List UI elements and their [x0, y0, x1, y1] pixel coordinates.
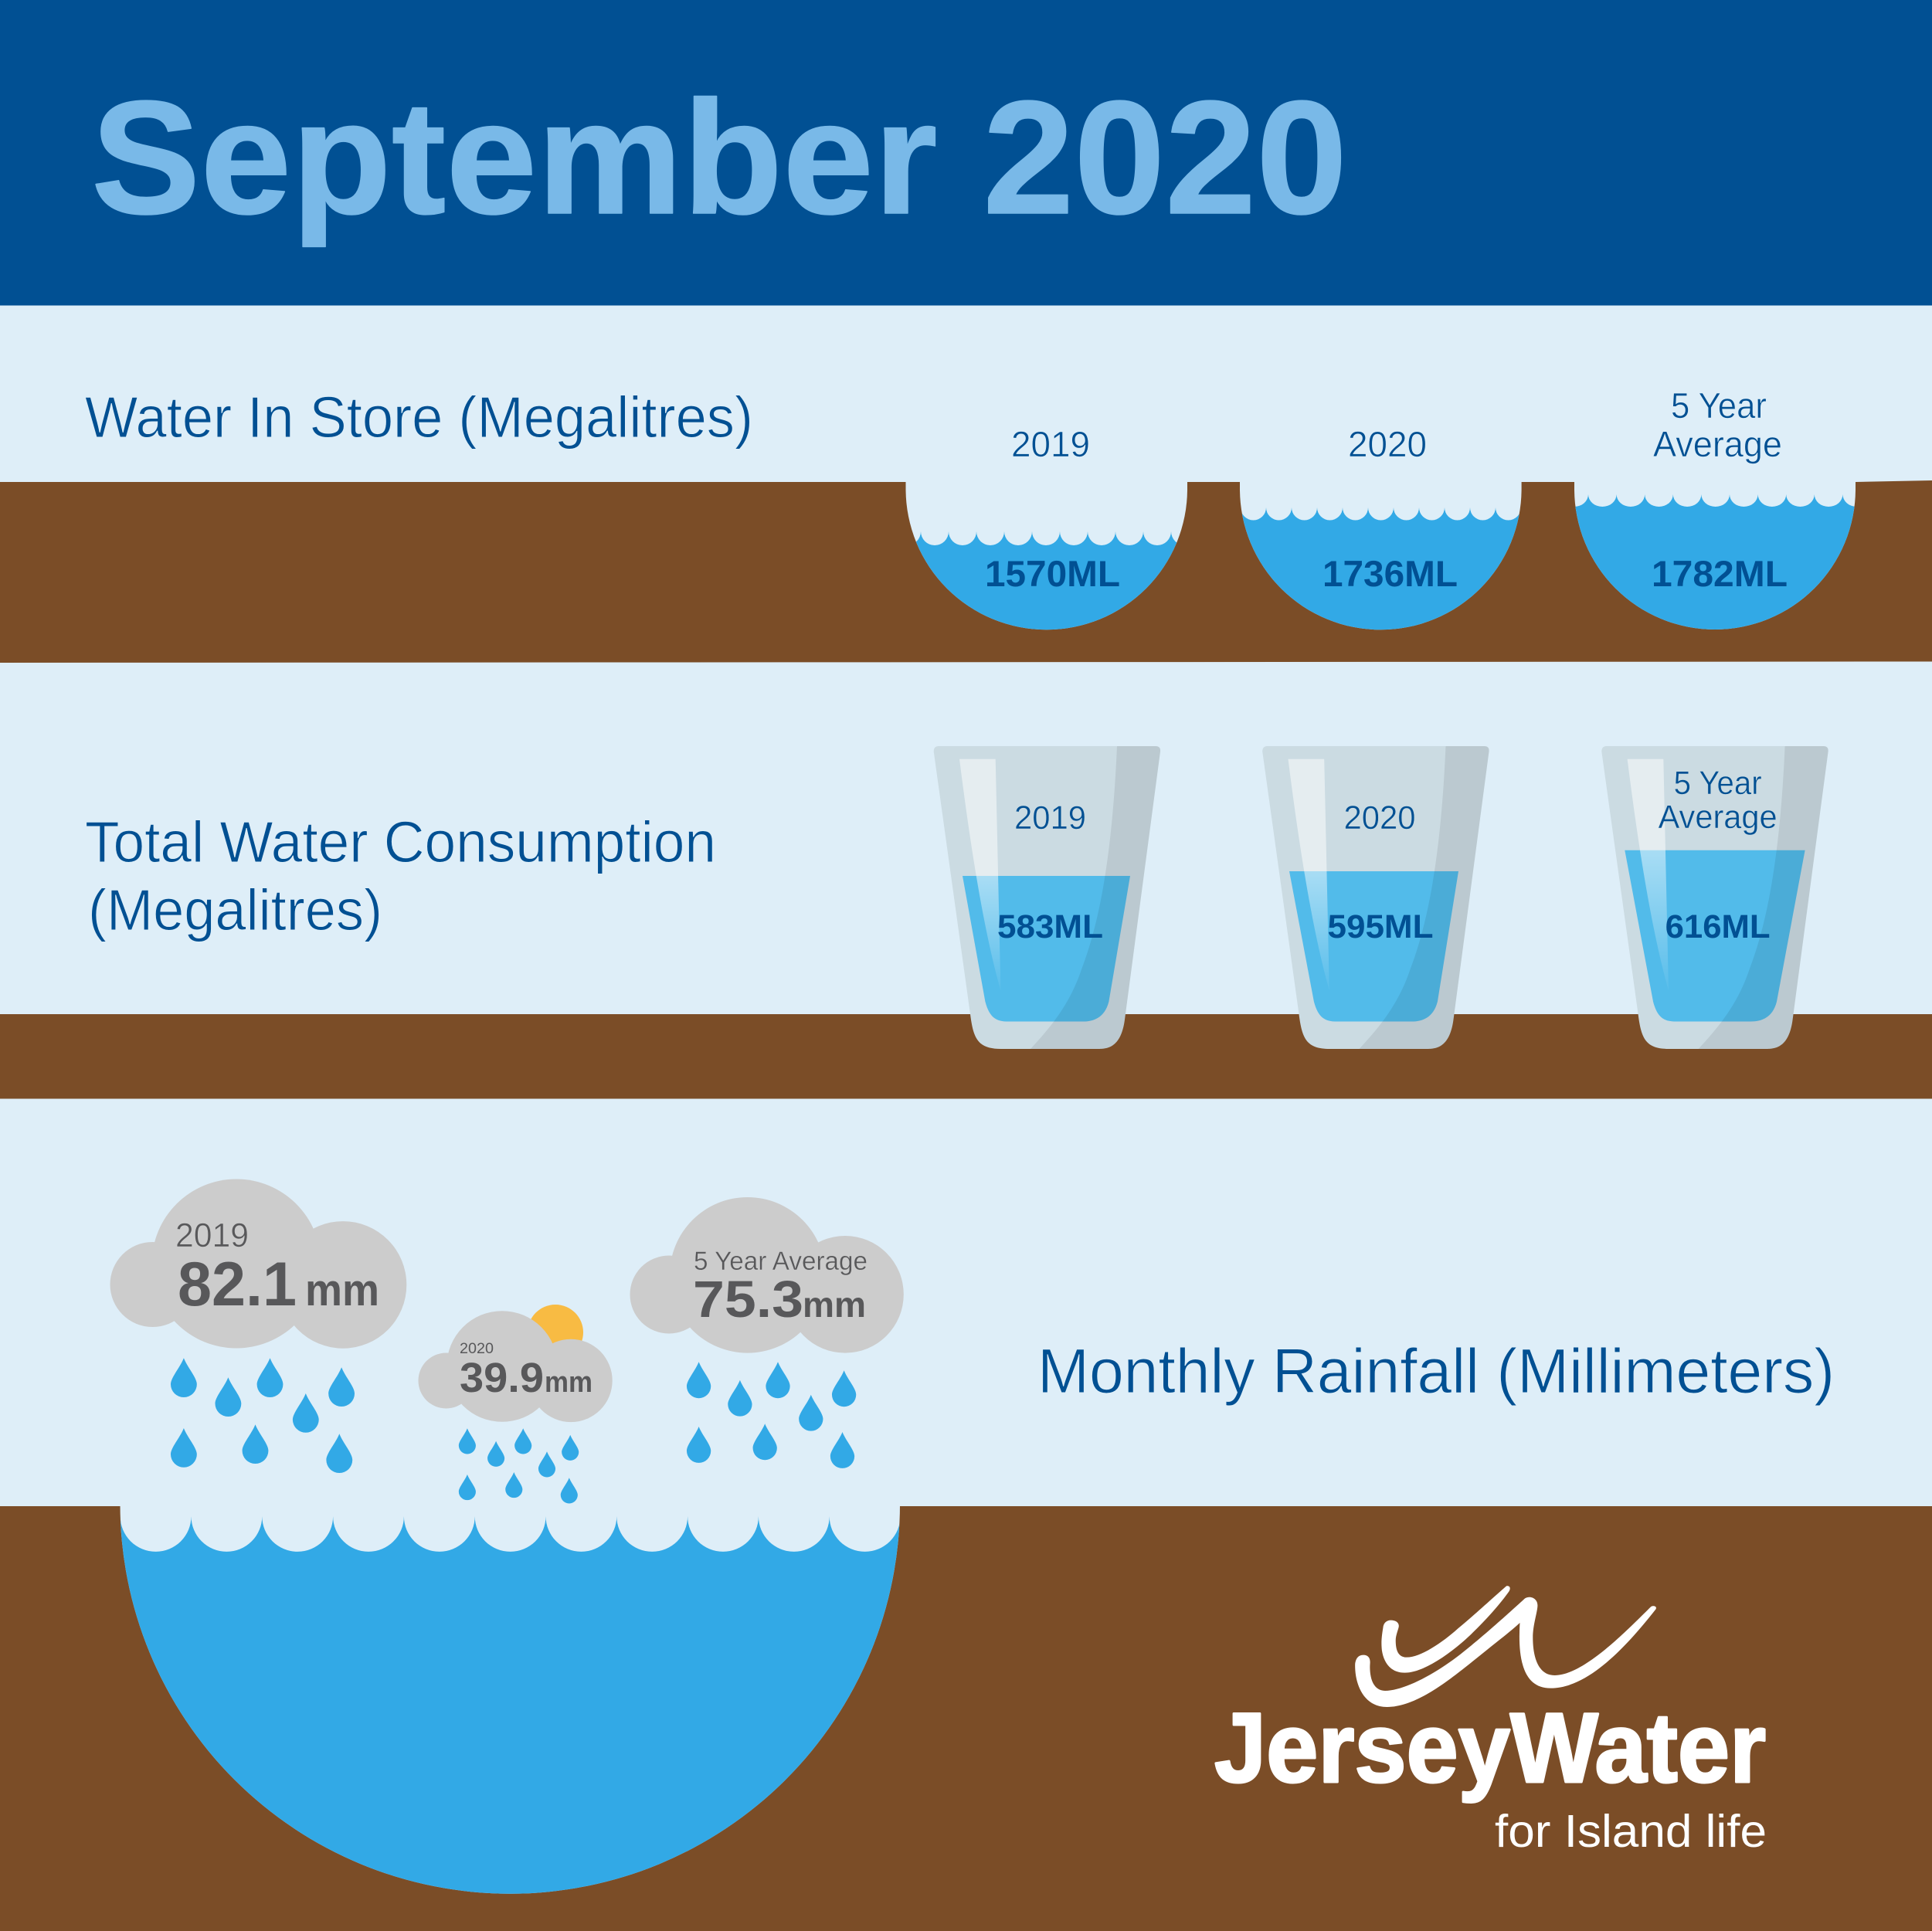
- rain 2019: [171, 1358, 355, 1473]
- reservoir 2020: 2020: [1348, 424, 1427, 464]
- heading: water in store: Water In Store (Megalitres): [85, 385, 753, 450]
- cloud 5 year average: 75.3: [693, 1271, 803, 1329]
- cloud 2019: mm: [305, 1265, 379, 1315]
- cloud 2020: 2020: [460, 1341, 494, 1357]
- reservoir 5 year average: 1782ML: [1652, 553, 1788, 594]
- tagline: for Island life: [1495, 1806, 1767, 1857]
- logo: Jersey Water: [1214, 1586, 1767, 1857]
- reservoir 2019: [905, 431, 1187, 630]
- icon: sun: [528, 1305, 583, 1360]
- large reservoir: [121, 1504, 901, 1931]
- reservoir 5 year average: Average: [1653, 424, 1782, 464]
- reservoir 5 year average: [1574, 393, 1856, 630]
- icon: wave swooshes: [1355, 1586, 1656, 1707]
- panel: monthly rainfall: [0, 1179, 1932, 1931]
- glass 5 year average: 616ML: [1665, 908, 1771, 945]
- cloud 5 year average: [630, 1197, 904, 1353]
- reservoir 5 year average: 5 Year: [1671, 385, 1767, 426]
- cloud 2020: [419, 1311, 613, 1422]
- glass 2019: [934, 746, 1160, 1049]
- title: September 2020: [91, 68, 1347, 248]
- cloud 2020: mm: [545, 1366, 593, 1399]
- heading: total water consumption: Total Water Consumption: [85, 809, 716, 874]
- glass 5 year average: 5 Year: [1674, 765, 1762, 802]
- glass 2020: [1262, 746, 1489, 1049]
- rain 5 year average: [687, 1362, 856, 1468]
- reservoir 2020: [1240, 431, 1522, 630]
- cloud 2020: 39.9: [460, 1355, 544, 1401]
- heading: monthly rainfall: Monthly Rainfall (Millimeters): [1037, 1336, 1835, 1407]
- cloud 2019: 82.1: [178, 1250, 297, 1319]
- glass 2020: 595ML: [1327, 908, 1434, 945]
- glass 2020: 2020: [1344, 799, 1415, 837]
- glass 2019: 583ML: [997, 908, 1103, 945]
- glass 5 year average: [1601, 746, 1828, 1049]
- wordmark: JerseyWater: [1214, 1693, 1766, 1804]
- reservoir 2020: 1736ML: [1323, 553, 1458, 594]
- reservoir 2019: 1570ML: [985, 553, 1120, 594]
- panel: total water consumption: [0, 746, 1932, 1098]
- header band: [0, 0, 1932, 306]
- ground shelf: [0, 1014, 1932, 1098]
- panel: water in store: [0, 385, 1932, 663]
- glass 5 year average: Average: [1659, 799, 1778, 836]
- rain 2020: [459, 1428, 579, 1503]
- ground strip: [0, 480, 1932, 663]
- cloud 2019: 2019: [175, 1217, 249, 1254]
- cloud 5 year average: mm: [803, 1285, 866, 1325]
- ground base: [0, 1506, 1932, 1931]
- cloud 5 year average: 5 Year Average: [694, 1247, 868, 1276]
- heading: total water consumption: (Megalitres): [88, 877, 382, 942]
- reservoir 2019: 2019: [1011, 424, 1090, 464]
- glass 2019: 2019: [1014, 799, 1086, 837]
- cloud 2019: [110, 1179, 406, 1349]
